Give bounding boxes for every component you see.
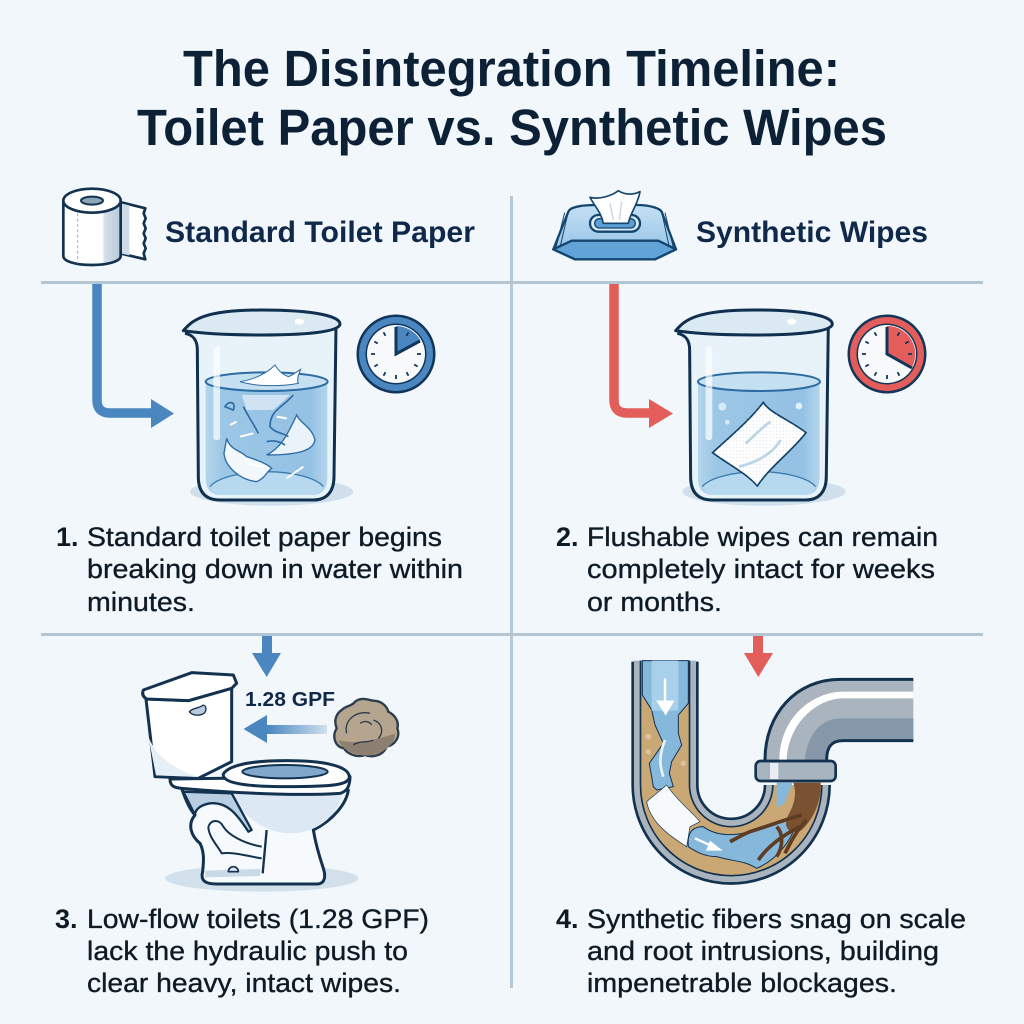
arrow: blue down [252,636,281,677]
text: step 2: or months. [587,587,722,617]
title: The Disintegration Timeline: [183,40,840,97]
text: step 4 [556,904,966,998]
heading: synthetic wipes: Synthetic Wipes [696,216,928,249]
icon: toilet paper roll [63,189,146,265]
heading: standard toilet paper: Standard Toilet Paper [165,216,475,249]
icon: wipe clump [334,699,398,756]
text: step 1: Standard toilet paper begins [87,522,442,552]
text: step 1: minutes. [87,587,195,617]
icon: wipes package [553,191,676,259]
text: step 1 [56,522,463,617]
text: step 4: 4. [556,904,579,934]
illustration: low-flow toilet [143,673,358,892]
arrow: weak flow [244,715,327,743]
text: step 1: 1. [56,522,79,552]
text: step 2: Flushable wipes can remain [587,522,938,552]
icon: clock, minutes [356,314,436,394]
illustration: clogged p-trap pipe [642,661,913,868]
text: step 2: completely intact for weeks [587,554,935,584]
text: step 3: Low-flow toilets (1.28 GPF) [87,904,429,934]
text: step 3: clear heavy, intact wipes. [87,968,401,998]
title [137,40,887,156]
icon: clock, weeks [848,314,926,394]
title: Toilet Paper vs. Synthetic Wipes [137,99,887,156]
label: 1.28 GPF: 1.28 GPF [245,689,335,711]
text: step 3 [55,904,429,998]
illustration: beaker with intact wipe [676,310,846,506]
text: step 4: and root intrusions, building [587,936,939,966]
text: step 2 [556,522,938,617]
text: step 2: 2. [556,522,579,552]
text: step 4: Synthetic fibers snag on scale [587,904,966,934]
text: step 3: 3. [55,904,78,934]
arrow: red elbow [614,284,673,428]
arrow: red down [744,636,773,677]
text: step 1: breaking down in water within [87,554,463,584]
text: step 4: impenetrable blockages. [587,968,897,998]
illustration: beaker with dissolving toilet paper [183,310,353,506]
text: step 3: lack the hydraulic push to [87,936,408,966]
arrow: blue elbow [97,284,174,428]
